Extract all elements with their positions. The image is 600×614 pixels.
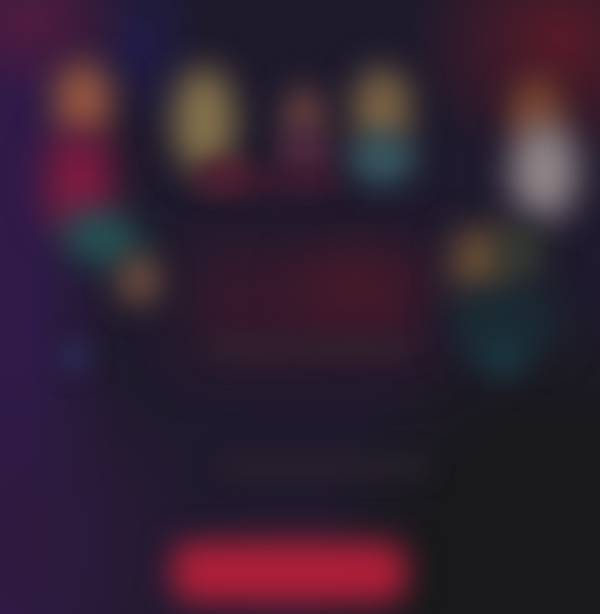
- tan segment: [118, 255, 160, 305]
- figure 1 body: [46, 136, 112, 226]
- central dark red panel: [190, 245, 430, 360]
- figure 2 shape: [173, 67, 235, 175]
- lower faded text line: [220, 458, 430, 474]
- central faded text line: [210, 340, 415, 356]
- olive shoulder: [496, 225, 542, 285]
- red accent under figure 2: [202, 160, 252, 188]
- teal leg: [478, 305, 526, 375]
- figure 4 body: [349, 134, 415, 184]
- red call-to-action button: [172, 542, 406, 602]
- small blue dot at left: [58, 340, 90, 372]
- left lower object: teal and tan diagonal: [49, 192, 176, 320]
- character 3: muted red figure: [266, 74, 343, 177]
- character 4: gold and teal figure: [334, 50, 431, 198]
- figure 1 head: [54, 62, 112, 138]
- right lower figure: orange and teal: [432, 210, 550, 383]
- figure 3 body: [276, 132, 334, 176]
- teal segment: [57, 203, 147, 273]
- character 1: red figure with orange head: [23, 44, 136, 242]
- figure 5 hair: [510, 76, 562, 142]
- figure 3 head: [282, 86, 326, 146]
- central red glow: [300, 255, 410, 325]
- character 5: white figure with red hair: [487, 68, 600, 238]
- figure 4 head: [353, 68, 411, 148]
- crimson strip under figures: [190, 170, 340, 192]
- dark teal panel at right: [450, 290, 560, 350]
- character 2: golden figure: [152, 50, 256, 188]
- figure 5 body: [510, 122, 578, 220]
- orange arm: [450, 227, 512, 297]
